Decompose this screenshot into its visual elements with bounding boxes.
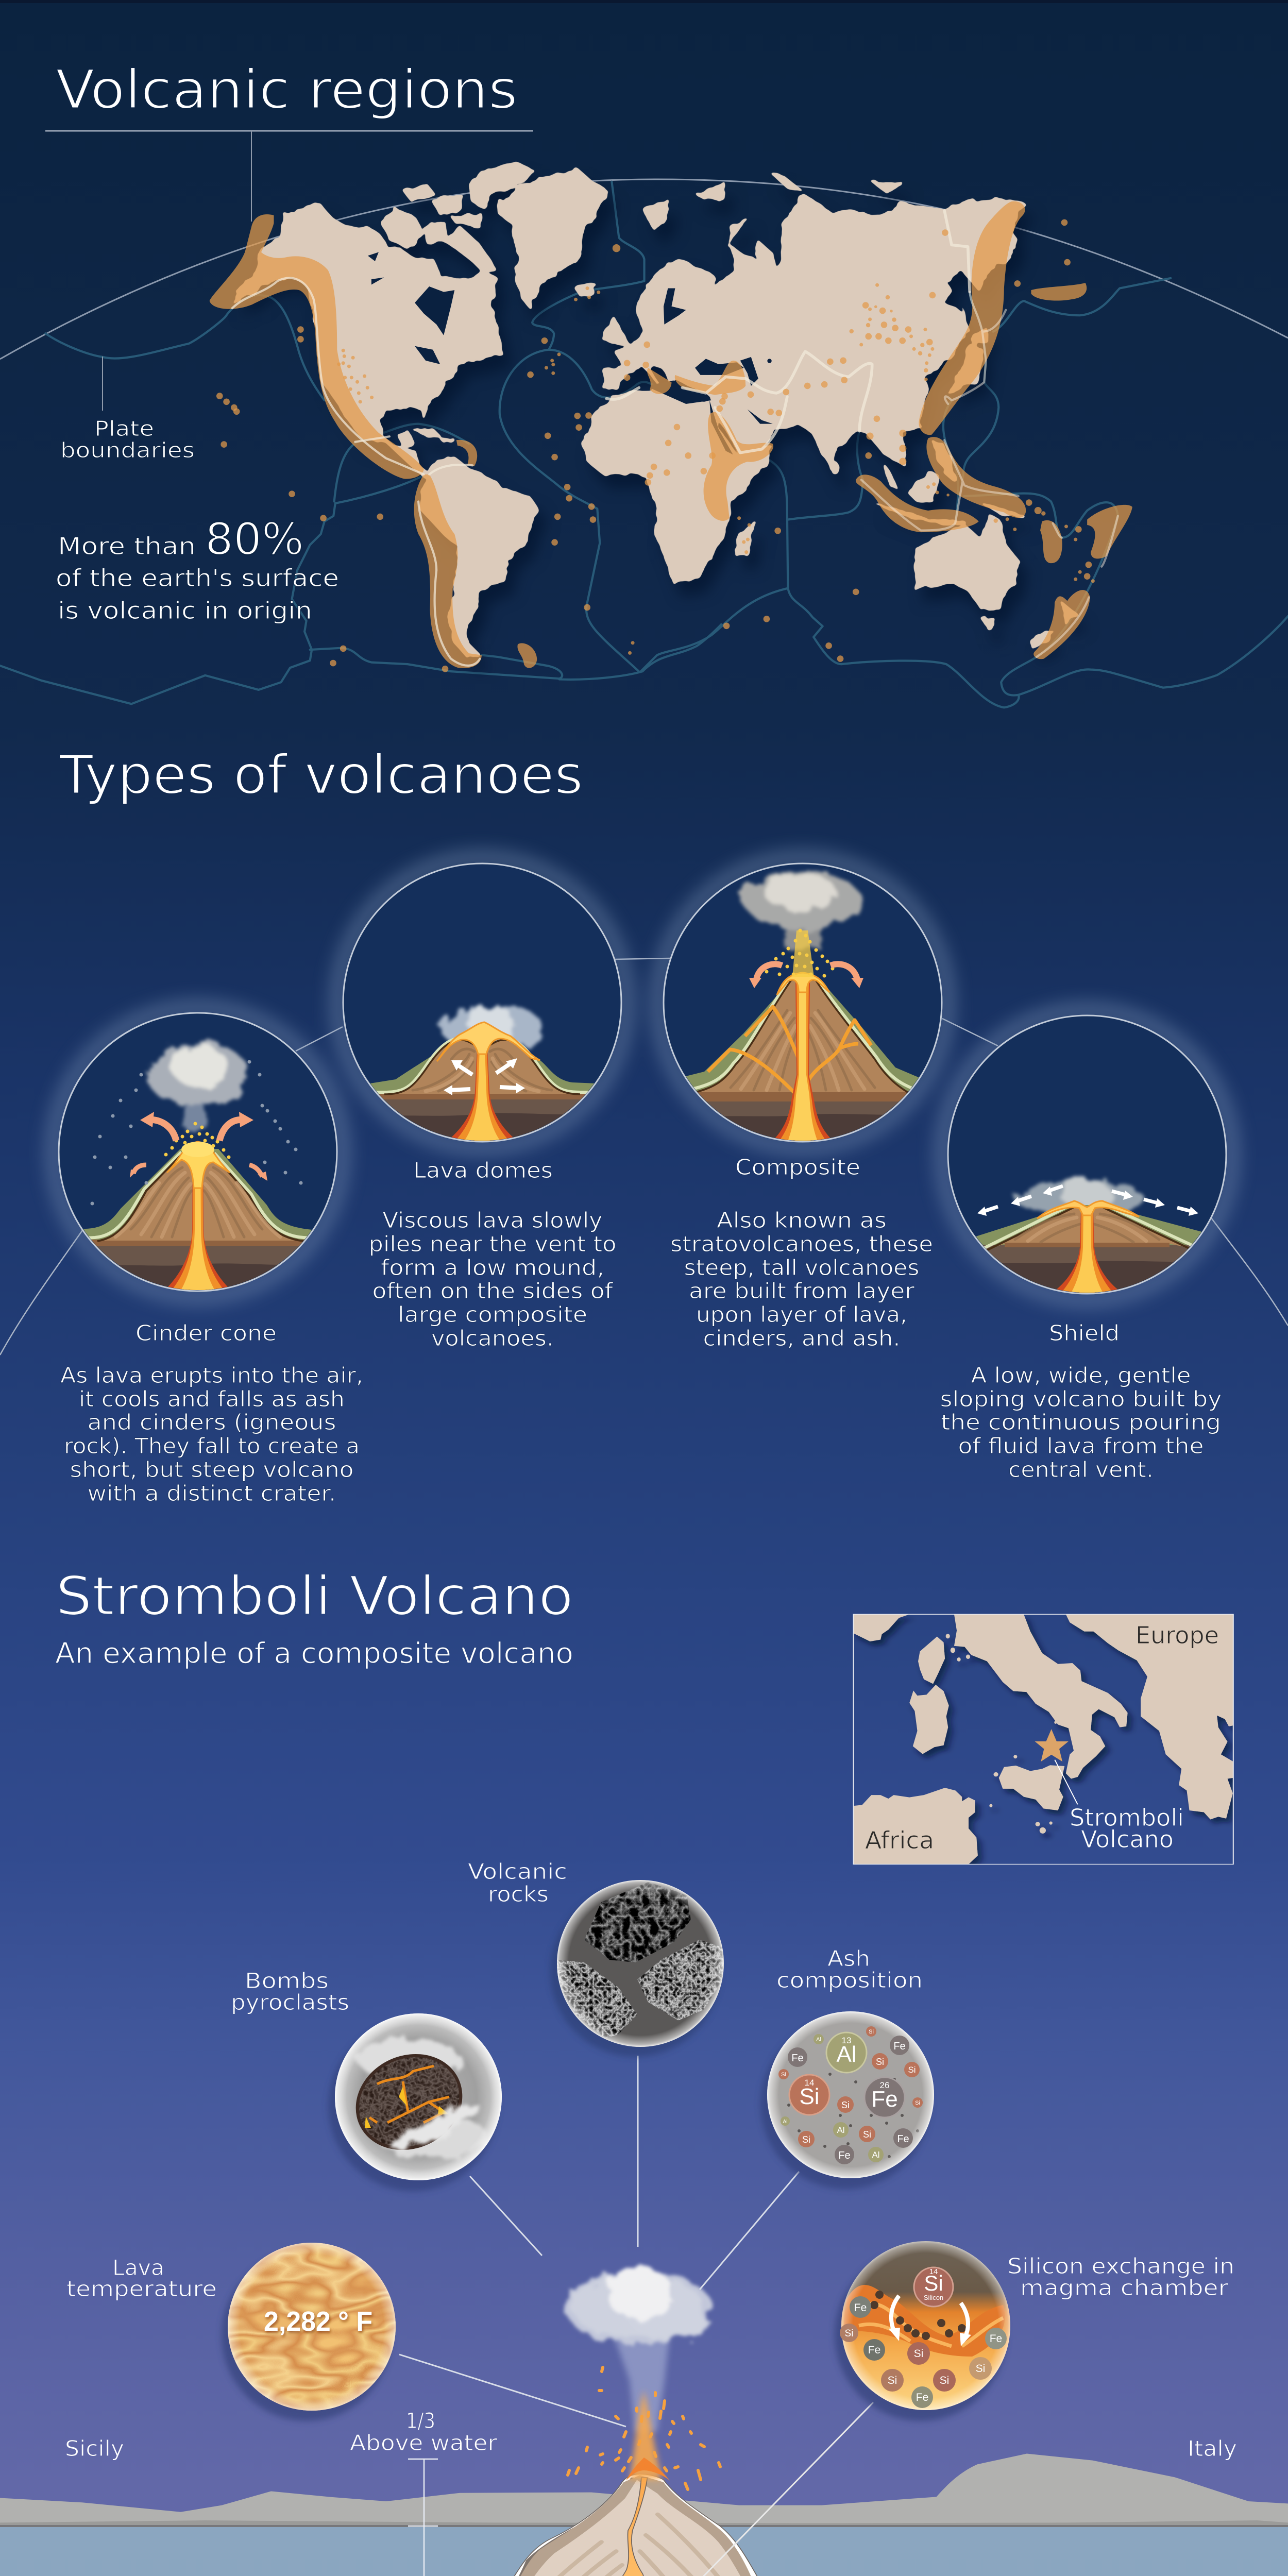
- text: shield description: central vent.: [1008, 1457, 1154, 1482]
- text: lava domes description: volcanoes.: [431, 1326, 554, 1351]
- arrows: [756, 964, 857, 979]
- label: ash composition: Ash: [827, 1946, 870, 1971]
- icon: star marking Stromboli: [1035, 1729, 1069, 1761]
- label: Sicily: Sicily: [65, 2436, 124, 2461]
- atoms: Si: [940, 2375, 949, 2386]
- atoms: [840, 2267, 1007, 2408]
- volcano: lava dome: [343, 863, 621, 1146]
- label: one third above water: [350, 2408, 498, 2455]
- lava arrows: [149, 1120, 243, 1141]
- text: shield description: of fluid lava from the: [958, 1433, 1204, 1459]
- scale bar: [408, 2459, 438, 2576]
- label: plate boundaries: boundaries: [60, 438, 195, 463]
- text: lava domes description: often on the sides of: [372, 1278, 614, 1303]
- text: composite description: Also known as: [717, 1208, 887, 1233]
- ball: ash composition: [760, 2011, 934, 2189]
- cloud: [744, 870, 859, 948]
- atoms: Al: [872, 2150, 880, 2160]
- label: plate boundaries: Plate: [94, 416, 154, 441]
- volcano halo glows: [54, 858, 1231, 1299]
- label: one third above water: Above water: [350, 2430, 498, 2455]
- leader lines: [399, 2056, 873, 2576]
- atoms: Al: [836, 2042, 857, 2067]
- atoms: Fe: [854, 2302, 867, 2314]
- diagram: Stromboli cross-section: [0, 2267, 1288, 2576]
- label: one third above water: 1/3: [406, 2408, 435, 2433]
- atoms: Si: [914, 2348, 923, 2360]
- text: cinder cone description: with a distinct crater.: [88, 1481, 336, 1506]
- atoms: Fe: [990, 2333, 1002, 2345]
- ash speckles: [92, 1062, 301, 1204]
- atoms: Si: [976, 2363, 985, 2375]
- sea: [0, 2527, 1288, 2576]
- label: ash composition: [776, 1946, 923, 1993]
- text: composite description: stratovolcanoes, these: [670, 1231, 933, 1257]
- arrows: [982, 1186, 1193, 1212]
- exchange arrows: [891, 2296, 968, 2337]
- label: silicon exchange: magma chamber: [1020, 2275, 1229, 2300]
- atoms: Si: [802, 2134, 810, 2145]
- title: types of volcanoes: Types of volcanoes: [59, 743, 583, 806]
- atoms: Silicon: [924, 2294, 943, 2301]
- atoms: Fe: [916, 2392, 928, 2403]
- atoms: Si: [924, 2271, 943, 2295]
- title: volcanic regions: Volcanic regions: [56, 58, 518, 121]
- label: lava domes: Lava domes: [413, 1158, 553, 1183]
- label: silicon exchange: Silicon exchange in: [1007, 2253, 1234, 2279]
- atoms: [778, 2026, 923, 2164]
- text: lava domes description: piles near the vent to: [369, 1231, 616, 1257]
- text: composite description: steep, tall volcanoes: [684, 1255, 919, 1280]
- label: bombs pyroclasts: Bombs: [245, 1968, 329, 1993]
- text: cinder cone description: As lava erupts into the air,: [60, 1363, 363, 1388]
- text: 80 percent statistic: [56, 514, 339, 624]
- ball: lava temperature: [222, 2243, 396, 2421]
- label: cinder cone: Cinder cone: [135, 1320, 277, 1346]
- atoms: Si: [841, 2100, 850, 2110]
- inset map: Italy and Stromboli location: [854, 1614, 1233, 1864]
- label: silicon exchange: [1007, 2253, 1234, 2300]
- section: volcanic regions: [0, 58, 1288, 707]
- smoke cloud: [146, 1043, 249, 1131]
- map label: Africa: Africa: [865, 1826, 934, 1854]
- label: bombs pyroclasts: pyroclasts: [231, 1990, 349, 2015]
- volcano: shield: [948, 1015, 1226, 1296]
- text: 80 percent statistic: of the earth's surface: [56, 564, 339, 592]
- text: composite description: [670, 1208, 933, 1351]
- atoms: Si: [781, 2072, 786, 2078]
- text: shield description: [940, 1363, 1222, 1482]
- title: Stromboli Volcano: Stromboli Volcano: [56, 1565, 573, 1628]
- atoms: 14: [929, 2267, 938, 2276]
- label: volcanic rocks: Volcanic: [468, 1859, 567, 1884]
- label: ash composition: composition: [776, 1968, 923, 1993]
- steam: [1015, 1179, 1144, 1217]
- lava sparks: [568, 2367, 720, 2489]
- label: lava temperature: temperature: [66, 2276, 217, 2301]
- atoms: Al: [816, 2037, 821, 2043]
- text: shield description: A low, wide, gentle: [971, 1363, 1191, 1388]
- atoms: Si: [888, 2375, 897, 2386]
- text: composite description: cinders, and ash.: [703, 1326, 901, 1351]
- arrows: [449, 1061, 520, 1090]
- atoms: Fe: [791, 2053, 804, 2064]
- eruption plume: [566, 2267, 720, 2489]
- text: cinder cone description: it cools and falls as ash: [79, 1386, 345, 1412]
- ball: bombs pyroclasts: [328, 2013, 502, 2191]
- atoms: Al: [783, 2119, 787, 2125]
- atoms: 26: [880, 2080, 889, 2090]
- text: lava domes description: form a low mound,: [381, 1255, 604, 1280]
- text: 80 percent statistic: is volcanic in origin: [58, 597, 312, 624]
- text: shield description: the continuous pouring: [941, 1410, 1221, 1435]
- text: composite description: are built from layer: [689, 1278, 915, 1303]
- atoms: Si: [863, 2129, 871, 2140]
- atoms: 13: [842, 2036, 851, 2045]
- map label: Europe: Europe: [1136, 1621, 1219, 1649]
- section: Stromboli heading: [55, 1565, 573, 1670]
- text: lava domes description: [369, 1208, 616, 1351]
- text: lava domes description: large composite: [398, 1302, 587, 1327]
- atoms: Fe: [871, 2087, 898, 2112]
- distant hills: [0, 2454, 1288, 2527]
- spray: [767, 930, 833, 976]
- label: Italy: Italy: [1188, 2436, 1237, 2461]
- text: 80 percent statistic: More than: [58, 532, 196, 560]
- label: shield: Shield: [1049, 1320, 1120, 1346]
- label: composite: Composite: [735, 1155, 860, 1180]
- section: types of volcanoes: [0, 743, 1288, 1506]
- map label: Stromboli Volcano: [1070, 1804, 1184, 1853]
- text: cinder cone description: [60, 1363, 363, 1506]
- text: shield description: sloping volcano built by: [940, 1386, 1222, 1412]
- world map land: [232, 162, 1076, 659]
- atoms: Si: [915, 2100, 920, 2106]
- volcano: cinder cone: [59, 1013, 337, 1297]
- atoms: Fe: [893, 2041, 906, 2052]
- lava vents: [708, 1007, 871, 1095]
- volcano: composite: [664, 863, 942, 1148]
- ball: silicon exchange: [835, 2241, 1010, 2421]
- label: volcanic rocks: [468, 1859, 567, 1907]
- text: cinder cone description: short, but steep volcano: [70, 1457, 353, 1482]
- atoms: Si: [869, 2029, 874, 2035]
- label: lava temperature: [66, 2255, 217, 2301]
- atoms: Fe: [838, 2150, 851, 2161]
- subtitle: An example of a composite volcano: [55, 1637, 573, 1670]
- atoms: Si: [845, 2328, 853, 2339]
- plate boundary lines: [0, 182, 721, 704]
- atoms: 14: [805, 2078, 814, 2088]
- text: 80 percent statistic: 80%: [205, 514, 304, 565]
- ball: volcanic rocks: [550, 1880, 724, 2057]
- atoms: Si: [876, 2057, 884, 2067]
- atoms: Fe: [868, 2344, 880, 2356]
- atoms: Al: [837, 2125, 845, 2135]
- label: volcanic rocks: rocks: [488, 1882, 549, 1907]
- temperature reading: 2,282 ° F: [264, 2306, 372, 2337]
- label: bombs pyroclasts: [231, 1968, 349, 2015]
- volcano cone: [411, 2474, 876, 2576]
- text: lava domes description: Viscous lava slowly: [382, 1208, 603, 1233]
- inland seas: [368, 252, 773, 454]
- label: lava temperature: Lava: [112, 2255, 164, 2280]
- map label: Stromboli Volcano: Stromboli: [1070, 1804, 1184, 1832]
- atoms: Si: [799, 2084, 820, 2109]
- volcanic belts: [210, 214, 635, 672]
- steam: [441, 1004, 544, 1052]
- atoms: Si: [908, 2065, 916, 2075]
- text: cinder cone description: rock). They fall to create a: [64, 1433, 360, 1459]
- atoms: Fe: [897, 2133, 909, 2145]
- map label: Stromboli Volcano: Volcano: [1081, 1825, 1174, 1853]
- text: composite description: upon layer of lava,: [696, 1302, 907, 1327]
- label: plate boundaries: [60, 357, 195, 463]
- magma conduit and chamber: [560, 2478, 651, 2576]
- eruption cloud: [566, 2267, 712, 2345]
- text: cinder cone description: and cinders (igneous: [88, 1410, 336, 1435]
